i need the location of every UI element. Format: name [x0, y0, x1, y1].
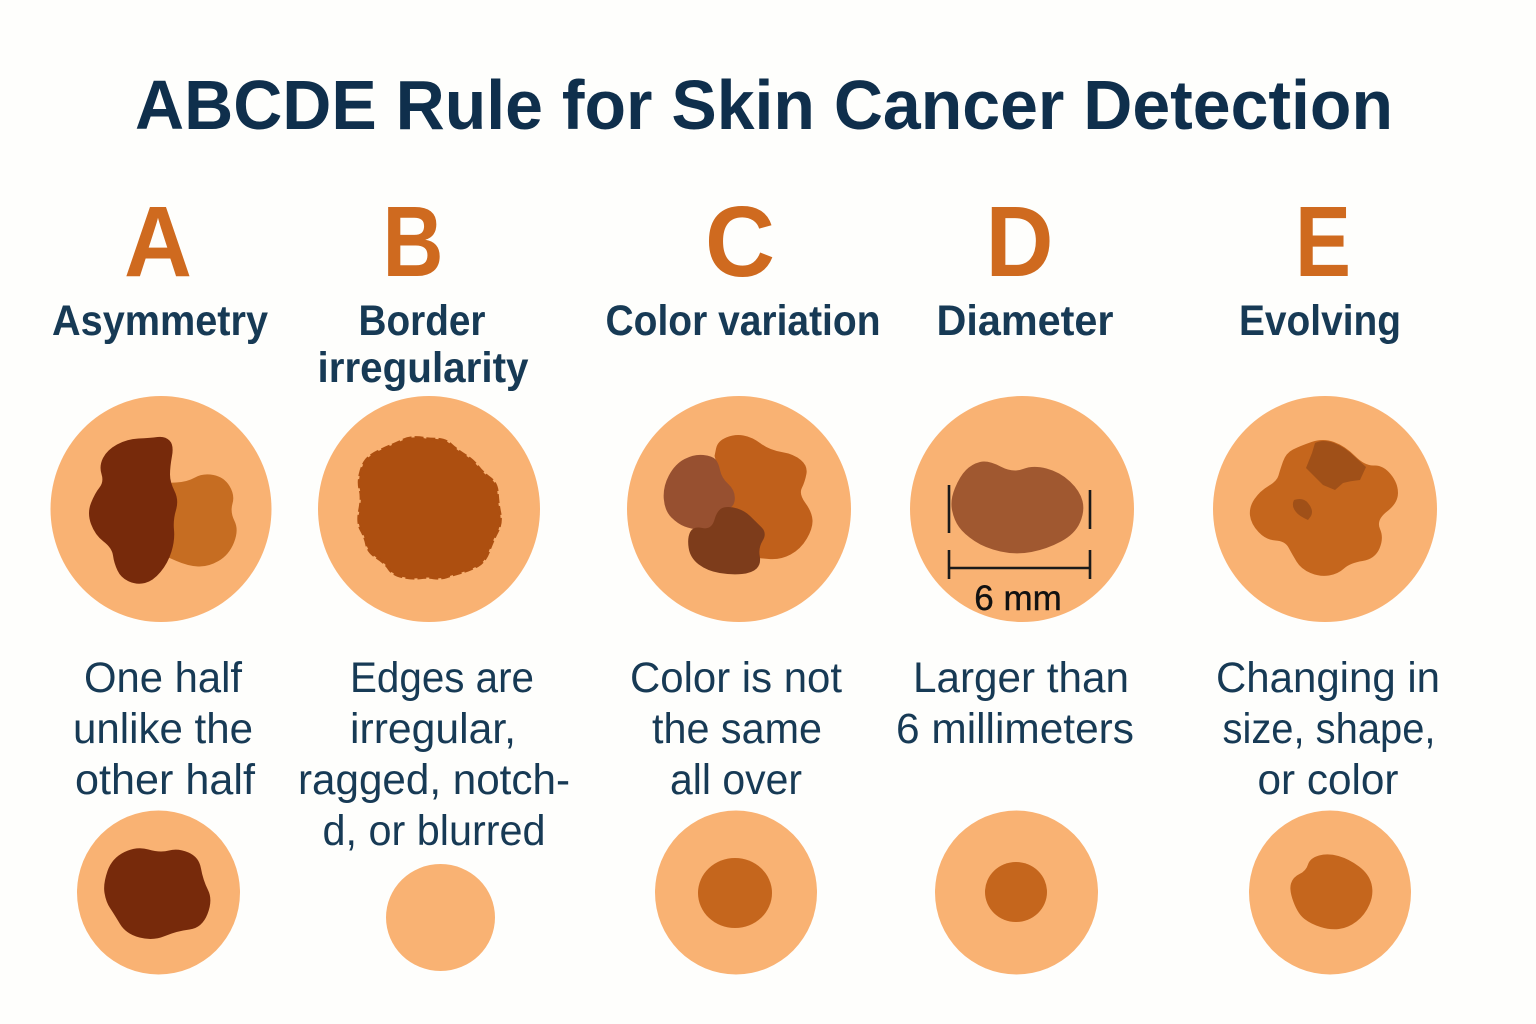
description: column B	[298, 654, 570, 855]
heading: Diameter: Diameter	[936, 297, 1114, 345]
letter A: A	[124, 186, 192, 298]
heading: Border irregularity: Border	[358, 297, 486, 345]
icon: evolving mole small	[1249, 810, 1411, 974]
label: 6 mm: 6 mm	[974, 579, 1062, 618]
description: column E	[1216, 654, 1440, 804]
letter D: D	[986, 186, 1054, 298]
heading: Asymmetry: Asymmetry	[52, 297, 268, 345]
letter E: E	[1295, 186, 1351, 298]
description: column C: the same	[652, 705, 822, 753]
description: column A: other half	[75, 756, 256, 804]
description: column C	[630, 654, 842, 804]
heading: Border irregularity: irregularity	[318, 344, 529, 392]
description: column A	[73, 654, 256, 804]
description: column A: One half	[84, 654, 243, 702]
heading: Border irregularity	[318, 297, 529, 392]
description: column B: Edges are	[350, 654, 534, 702]
icon: asymmetry mole large	[50, 396, 272, 622]
description: column C: all over	[670, 756, 802, 804]
description: column B: d, or blurred	[322, 807, 546, 855]
description: column B: irregular,	[350, 705, 516, 753]
icon: diameter mole small	[935, 810, 1098, 974]
description: column C: Color is not	[630, 654, 842, 702]
heading: Evolving: Evolving	[1239, 297, 1401, 345]
icon: asymmetry mole small	[77, 810, 240, 974]
icon: border mole small	[386, 864, 495, 971]
letter C: C	[705, 186, 775, 298]
description: column B: ragged, notch-	[298, 756, 570, 804]
description: column D: 6 millimeters	[896, 705, 1134, 753]
description: column D: Larger than	[913, 654, 1129, 702]
title: ABCDE Rule for Skin Cancer Detection	[135, 66, 1393, 144]
description: column A: unlike the	[73, 705, 253, 753]
description: column E: or color	[1258, 756, 1398, 804]
icon: border mole large	[318, 396, 540, 622]
icon: evolving mole large	[1213, 396, 1437, 622]
heading: Color variation: Color variation	[606, 297, 880, 345]
letter B: B	[382, 186, 444, 298]
description: column E: size, shape,	[1222, 705, 1436, 753]
icon: color mole small	[655, 810, 817, 974]
description: column D	[896, 654, 1134, 753]
icon: diameter mole large with 6 mm scale	[910, 396, 1134, 622]
description: column E: Changing in	[1216, 654, 1440, 702]
icon: color variation mole large	[627, 396, 851, 622]
